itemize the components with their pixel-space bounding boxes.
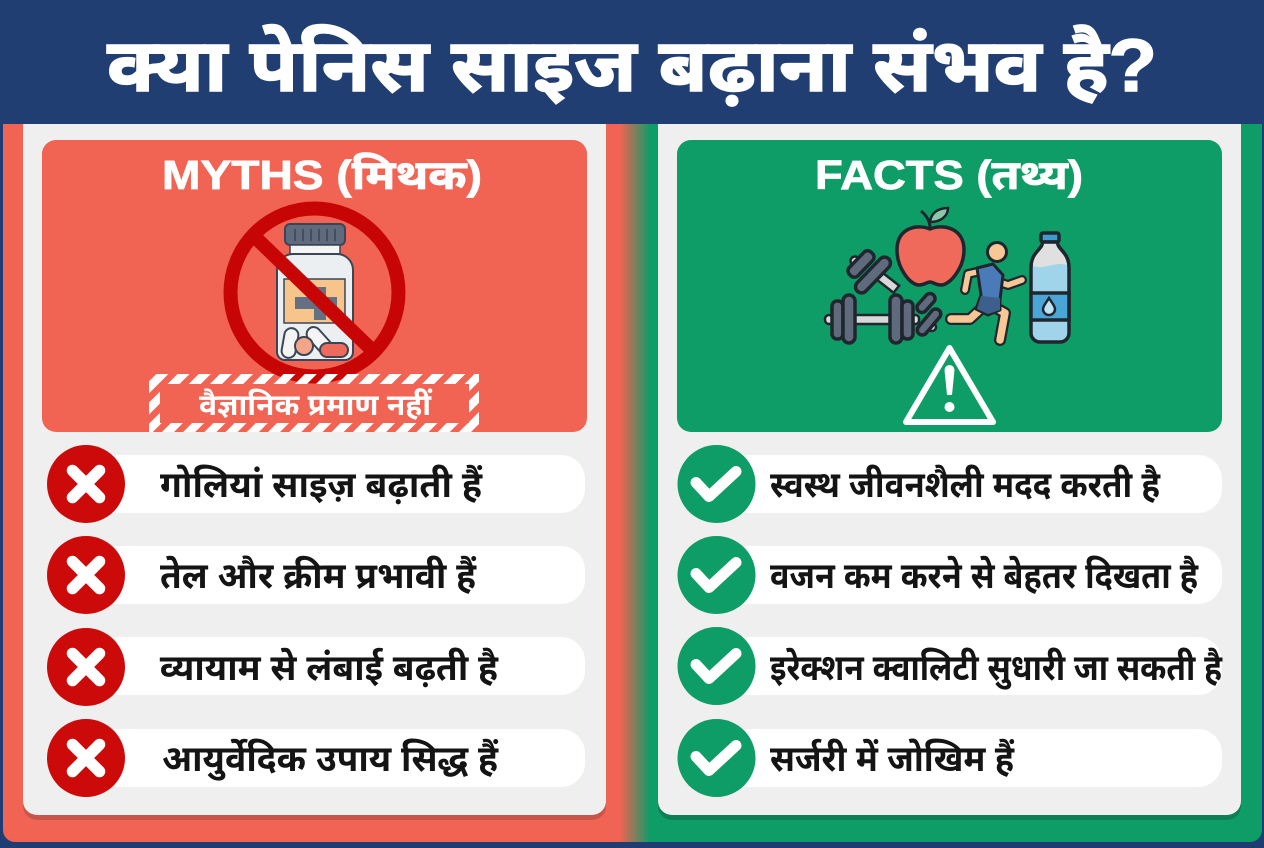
fact row 1: स्वस्थ जीवनशैली मदद करती है	[770, 463, 1161, 505]
myth row 2	[47, 536, 585, 614]
myth row 1	[47, 445, 585, 523]
title banner: क्या पेनिस साइज बढ़ाना संभव है?	[107, 24, 1157, 107]
fact row 4: सर्जरी में जोखिम हैं	[770, 738, 1015, 779]
myth row 3: व्यायाम से लंबाई बढ़ती है	[159, 646, 499, 688]
myth row 4	[47, 719, 585, 797]
icon: water bottle	[1031, 233, 1069, 342]
icon: dumbbells	[825, 249, 943, 343]
myths heading: MYTHS (मिथक)	[162, 152, 482, 198]
myth row 2: तेल और क्रीम प्रभावी हैं	[160, 554, 477, 596]
icon: warning triangle	[906, 348, 993, 422]
fact row 1	[678, 445, 1222, 523]
icon: apple	[897, 208, 964, 285]
fact row 4	[678, 719, 1222, 797]
fact row 2: वजन कम करने से बेहतर दिखता है	[770, 554, 1199, 596]
facts heading: FACTS (तथ्य)	[815, 152, 1083, 198]
myth row 4: आयुर्वेदिक उपाय सिद्ध हैं	[162, 738, 499, 781]
facts header block	[677, 140, 1222, 432]
myths header block	[42, 140, 587, 432]
warning tape label: वैज्ञानिक प्रमाण नहीं	[199, 387, 433, 422]
myth row 1: गोलियां साइज़ बढ़ाती हैं	[160, 464, 483, 505]
title banner	[0, 0, 1264, 124]
fact row 3	[678, 627, 1223, 705]
warning tape label	[149, 374, 479, 432]
icon: runner	[951, 242, 1022, 340]
myth row 3	[47, 628, 585, 706]
panel: facts	[658, 124, 1241, 820]
fact row 2	[678, 536, 1222, 614]
panel: myths	[23, 124, 606, 820]
icon: pill bottle crossed out	[230, 208, 398, 376]
